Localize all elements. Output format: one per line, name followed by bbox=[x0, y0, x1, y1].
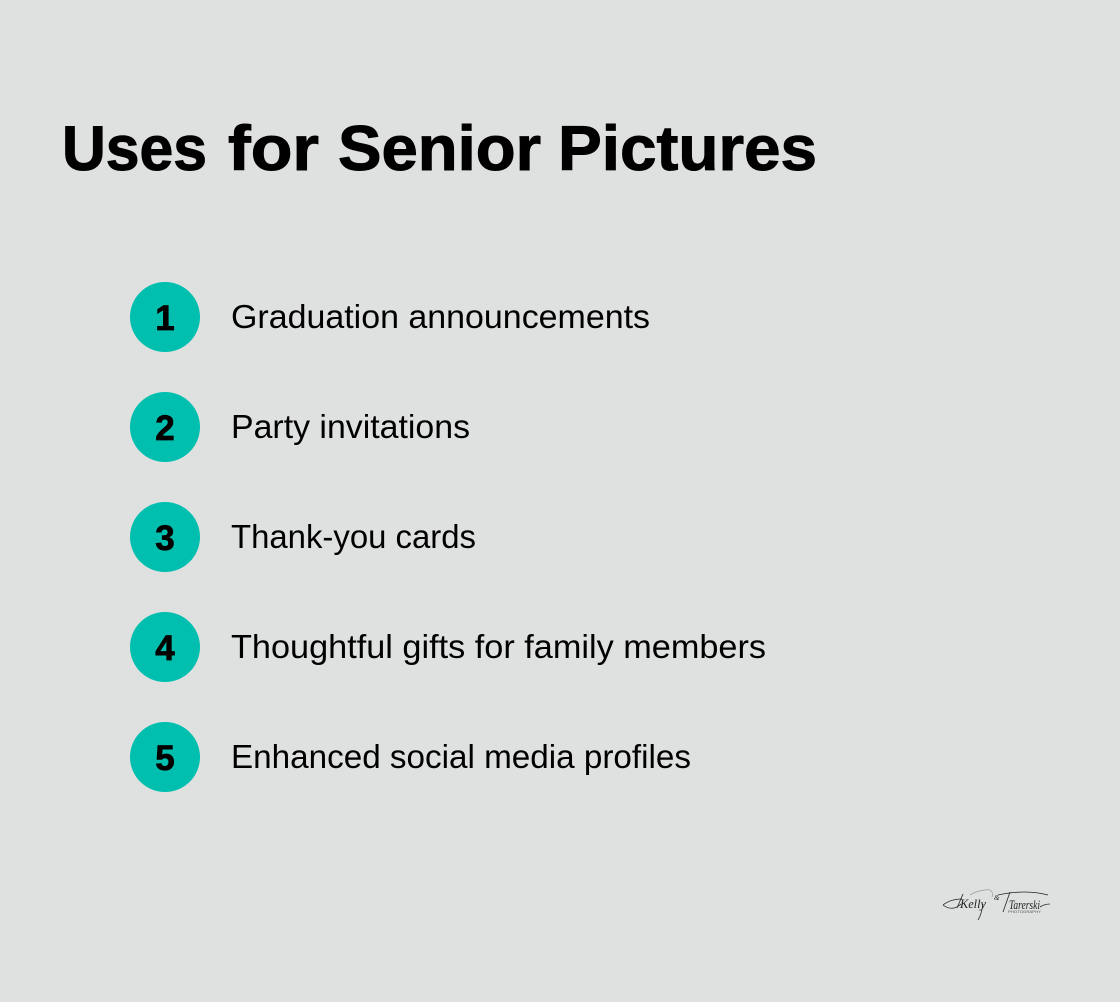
number badge 5 bbox=[130, 722, 200, 792]
title: Senior bbox=[338, 114, 541, 184]
number badge 3 bbox=[130, 502, 200, 572]
number badge 4: 4 bbox=[155, 629, 175, 668]
label 2: Party invitations bbox=[231, 408, 470, 445]
number badge 4 bbox=[130, 612, 200, 682]
list item 2 bbox=[130, 392, 470, 462]
number badge 3: 3 bbox=[155, 519, 175, 558]
logo: signature: Kelly bbox=[959, 896, 986, 911]
number badge 1 bbox=[130, 282, 200, 352]
logo: signature: & bbox=[994, 894, 1000, 902]
label 3: Thank-you cards bbox=[231, 518, 476, 555]
number badge 2 bbox=[130, 392, 200, 462]
title: Pictures bbox=[558, 114, 817, 184]
logo: signature bbox=[943, 890, 1050, 920]
list item 4 bbox=[130, 612, 766, 682]
title: Uses bbox=[62, 114, 207, 184]
title: for bbox=[228, 114, 319, 184]
number badge 5: 5 bbox=[155, 739, 175, 778]
number badge 2: 2 bbox=[155, 409, 175, 448]
label 1: Graduation announcements bbox=[231, 298, 650, 335]
logo: signature: PHOTOGRAPHY bbox=[1008, 910, 1042, 914]
label 4: Thoughtful gifts for family members bbox=[231, 628, 766, 665]
list item 1 bbox=[130, 282, 650, 352]
number badge 1: 1 bbox=[155, 299, 175, 338]
label 5: Enhanced social media profiles bbox=[231, 738, 691, 775]
list item 5 bbox=[130, 722, 691, 792]
logo: signature: Tarerski bbox=[1009, 897, 1040, 912]
list item 3 bbox=[130, 502, 476, 572]
